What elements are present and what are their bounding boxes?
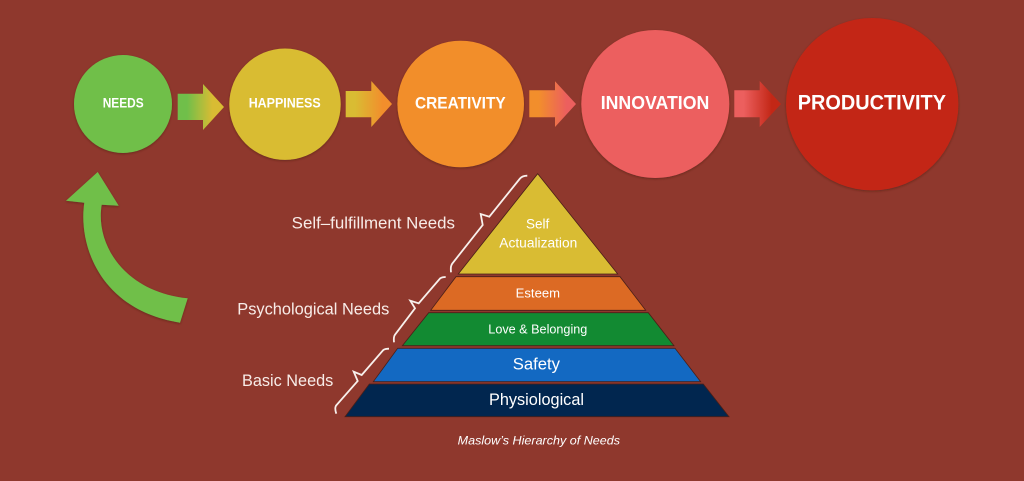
circle: needs: NEEDS [103, 96, 144, 111]
tier: love and belonging [402, 313, 674, 346]
circle: innovation: INNOVATION [601, 92, 709, 113]
circle: happiness: HAPPINESS [249, 96, 321, 111]
pyramid [345, 174, 729, 417]
circle: productivity: PRODUCTIVITY [798, 91, 946, 115]
brace: basic [335, 349, 389, 414]
brace: self-fulfillment [451, 176, 527, 272]
circle: innovation [581, 30, 729, 178]
tier: esteem: Esteem [516, 285, 560, 300]
label: self-fulfillment needs: Self–fulfillment Needs [292, 214, 455, 232]
tier: physiological [345, 384, 729, 417]
label: psychological needs: Psychological Needs [237, 300, 389, 318]
tier: safety [373, 348, 701, 382]
circle: needs [74, 55, 172, 153]
circle: creativity [397, 41, 524, 167]
tier: safety: Safety [513, 354, 560, 373]
tier: physiological: Physiological [489, 390, 584, 409]
tier: esteem [431, 277, 646, 310]
arrow: innovation to productivity [734, 81, 781, 127]
brace: psychological [394, 277, 446, 342]
label: basic needs: Basic Needs [242, 372, 333, 390]
caption: Maslow’s Hierarchy of Needs [458, 433, 620, 447]
tier: self actualization [458, 174, 618, 274]
arrow: needs to happiness [178, 84, 224, 130]
arrow: creativity to innovation [529, 81, 576, 127]
tier: self actualization: Actualization [499, 235, 577, 250]
circle: creativity: CREATIVITY [415, 95, 506, 113]
circle: happiness [229, 48, 341, 160]
arrow: happiness to creativity [346, 81, 392, 127]
tier: love and belonging: Love & Belonging [488, 322, 587, 336]
tier: self actualization: Self [526, 216, 550, 231]
circle: productivity [786, 18, 958, 190]
arrow: curved feedback arrow [66, 172, 188, 323]
